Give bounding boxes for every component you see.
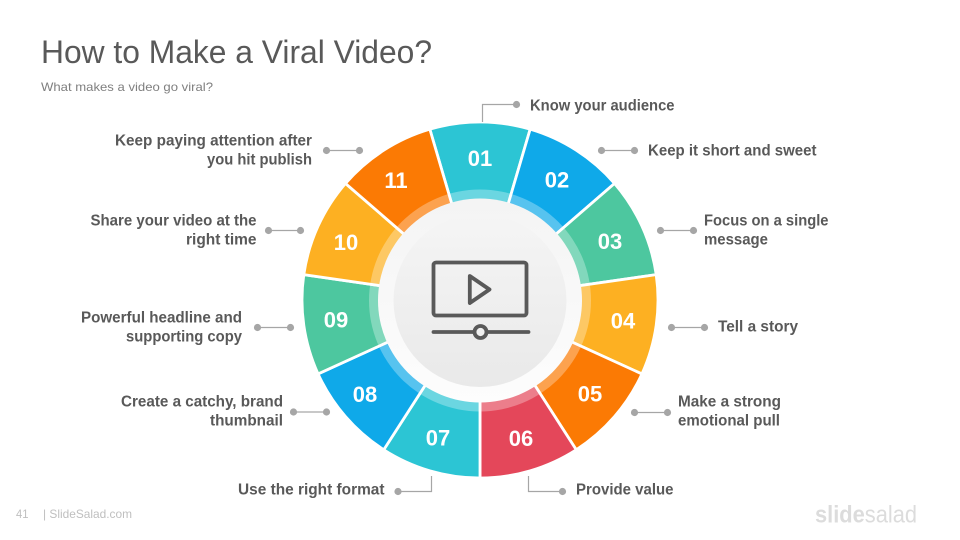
callout 03: message [704,231,768,248]
segment 09 [297,250,487,375]
callout 05: emotional pull [678,412,780,429]
callout 11: you hit publish [207,151,312,168]
segment 11: 11 [384,168,408,193]
callout 07: Use the right format [238,481,385,498]
title: How to Make a Viral Video? [41,34,432,70]
callout 11 [115,132,363,168]
footer site name: | SlideSalad.com [43,507,132,521]
central hub [378,198,582,402]
segment 05: 05 [578,381,602,406]
callout 04: Tell a story [718,318,798,335]
callout 06: Provide value [576,481,674,498]
callout 11: Keep paying attention after [115,132,312,149]
segment 07 [382,286,528,485]
segment 10 [297,180,501,346]
segment 06 [432,286,578,485]
segment 03 [459,180,663,346]
callout 05: Make a strong [678,393,781,410]
callout 04 [668,318,798,335]
callout 09: supporting copy [126,328,242,345]
callout 07 [238,476,432,498]
callout 01: Know your audience [530,97,675,114]
callout 08: thumbnail [210,412,283,429]
callout 08 [121,393,330,429]
callout 03 [657,212,829,248]
segment 11 [342,123,522,327]
segment 03: 03 [598,229,622,254]
callout 01 [482,97,675,122]
segment 02 [438,123,618,327]
segment 04 [473,250,663,375]
segment 05 [447,262,647,454]
segment 08: 08 [353,382,377,407]
segment 08 [313,262,513,454]
segment 01: 01 [468,146,492,171]
callout 02: Keep it short and sweet [648,142,817,159]
callout 05 [631,393,781,429]
segment 02: 02 [545,167,569,192]
callout 10 [90,212,304,248]
segment 06: 06 [509,426,533,451]
callout 06 [528,476,674,498]
callout 09: Powerful headline and [81,309,242,326]
segment 10: 10 [334,230,358,255]
callout 10: right time [186,231,257,248]
segment 09: 09 [324,307,348,332]
callout 03: Focus on a single [704,212,829,229]
page number: 41 [16,507,29,521]
icon: video player [434,262,528,338]
callout 10: Share your video at the [90,212,257,229]
segment 07: 07 [426,425,450,450]
translucent ring [369,190,591,412]
callout 09 [81,309,294,345]
segment 01 [430,122,530,300]
logo wordmark: slidesalad [815,502,917,528]
subtitle: What makes a video go viral? [41,80,213,94]
donut chart with eleven segments [297,122,663,485]
segment 04: 04 [611,308,636,333]
callout 08: Create a catchy, brand [121,393,283,410]
